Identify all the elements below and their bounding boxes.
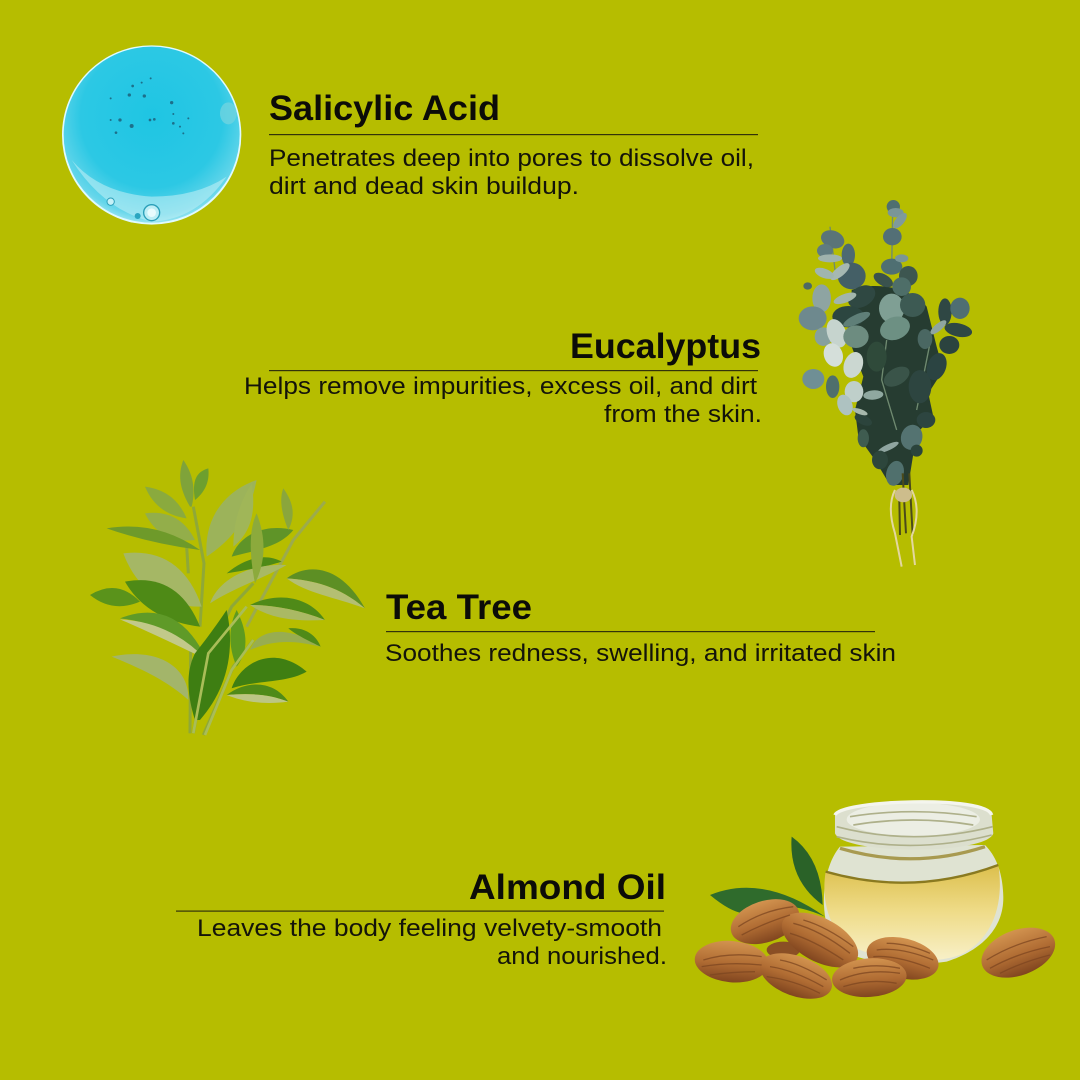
- heading: Tea Tree: Tea Tree: [386, 588, 532, 627]
- icon: almonds: [693, 891, 1062, 1008]
- icon: eucalyptus bunch: [799, 200, 973, 567]
- heading: Almond Oil: Almond Oil: [469, 868, 666, 907]
- heading: Eucalyptus: Eucalyptus: [570, 327, 761, 366]
- block: salicylic acid text: [269, 89, 758, 200]
- description: Eucalyptus: Helps remove impurities, excess oil, and dirt: [244, 373, 757, 400]
- heading: Salicylic Acid: Salicylic Acid: [269, 89, 500, 128]
- description: Tea Tree: Soothes redness, swelling, and irritated skin: [385, 640, 896, 667]
- description: Almond Oil: Leaves the body feeling velvety-smooth: [197, 915, 662, 942]
- description: Salicylic Acid: dirt and dead skin buildup.: [269, 173, 579, 200]
- description: Almond Oil: and nourished.: [497, 943, 667, 970]
- block: eucalyptus text: [244, 327, 762, 428]
- icon: almond oil jar with almonds: [693, 802, 1062, 1008]
- icon: salicylic acid gel drop: [62, 45, 241, 225]
- description: Salicylic Acid: [269, 145, 754, 200]
- block: tea tree text: [385, 588, 896, 667]
- icon: glass jar of oil: [824, 802, 1003, 964]
- description: Eucalyptus: [244, 373, 762, 428]
- icon: green leaves: [710, 837, 825, 917]
- block: almond oil text: [176, 868, 667, 970]
- description: Eucalyptus: from the skin.: [604, 401, 762, 428]
- description: Almond Oil: [197, 915, 667, 970]
- icon: tea tree sprig: [90, 460, 365, 735]
- description: Salicylic Acid: Penetrates deep into pores to dissolve oil,: [269, 145, 754, 172]
